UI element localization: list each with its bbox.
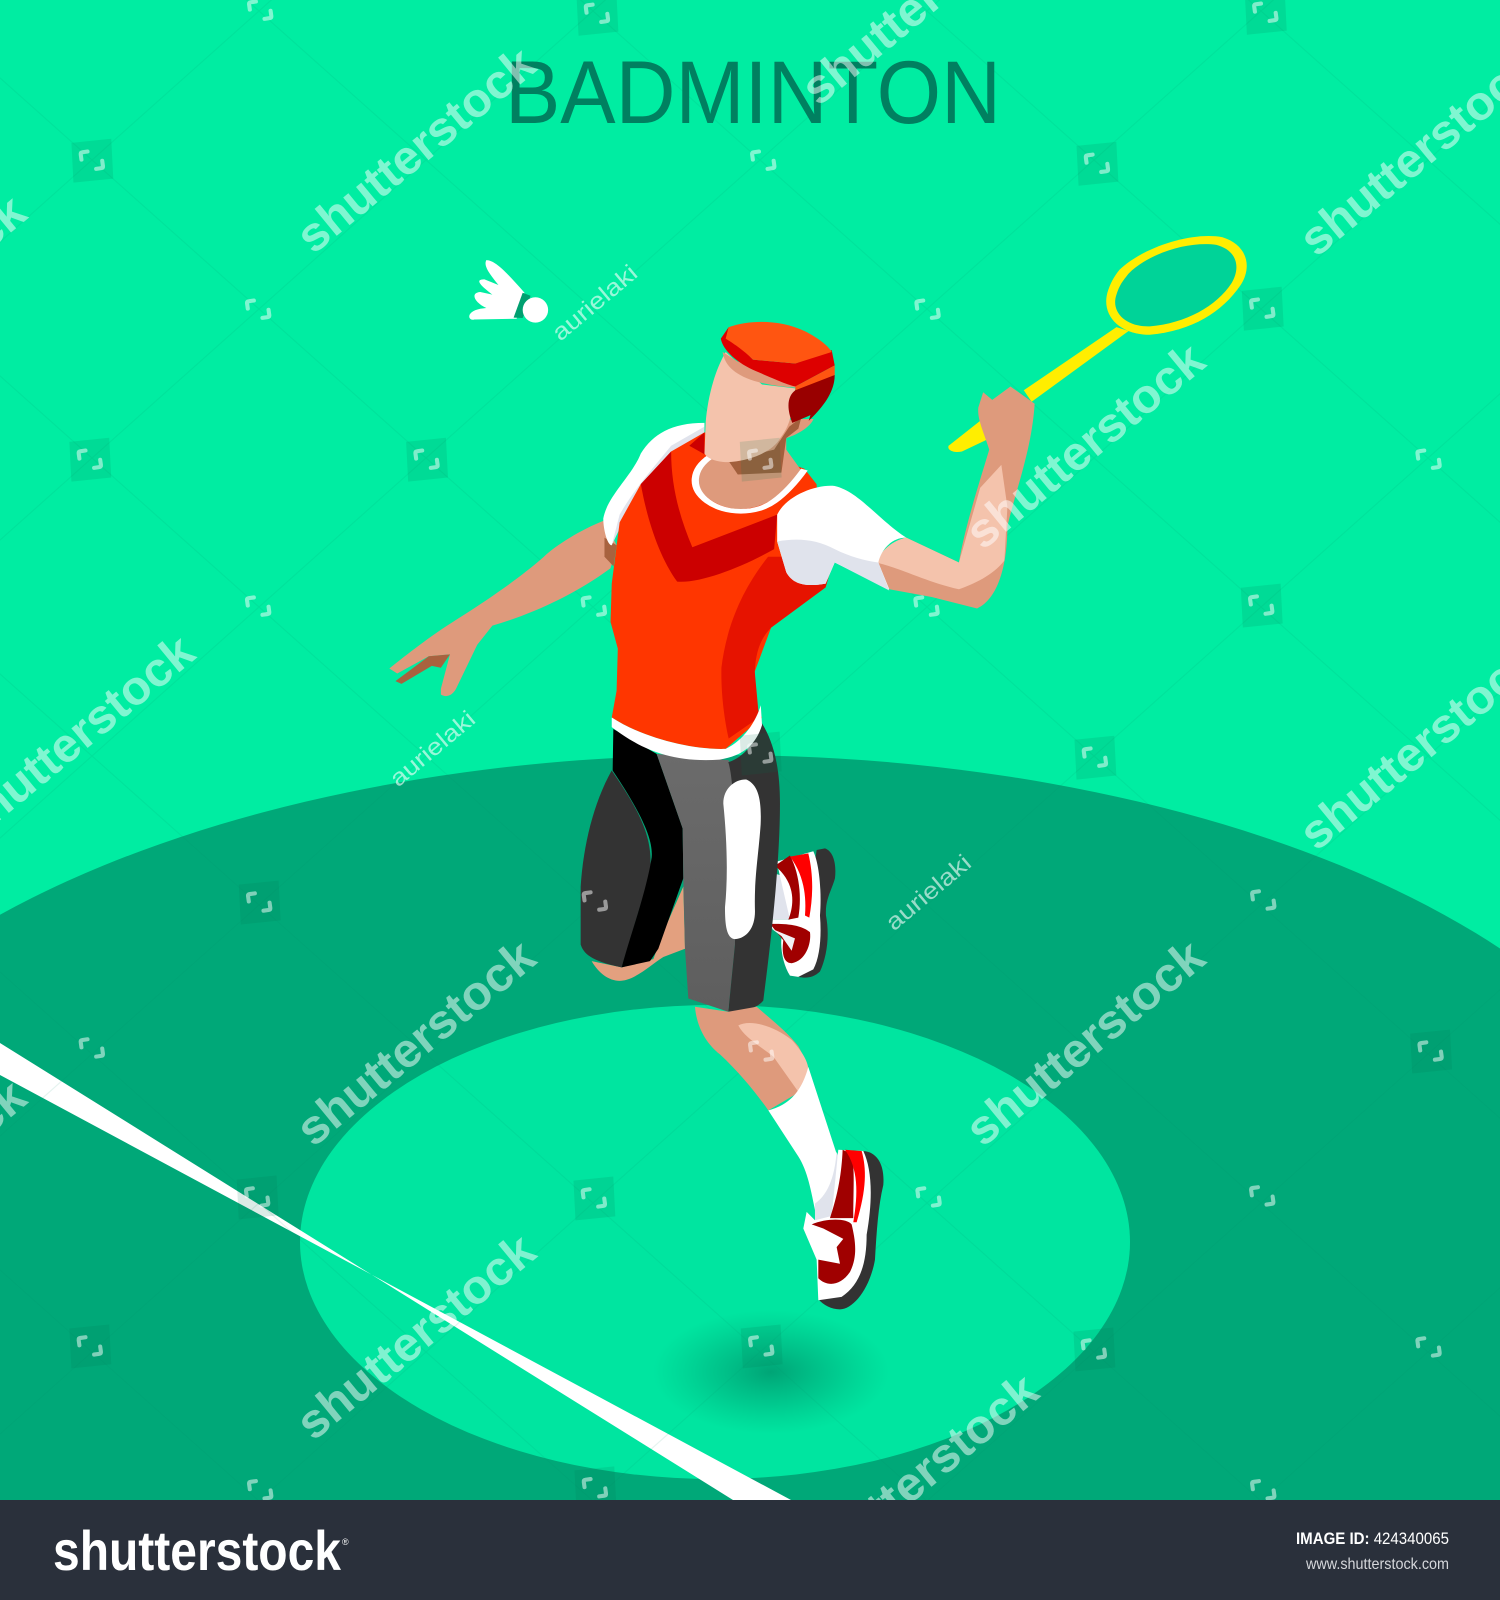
contributor watermarks: text xyxy=(384,260,976,935)
court: dark green ellipse xyxy=(0,755,1500,1600)
vest body xyxy=(611,432,826,749)
back foot xyxy=(772,848,835,978)
shorts xyxy=(581,723,780,1012)
collar xyxy=(695,457,804,511)
contributor watermarks: text: aurielaki xyxy=(880,849,976,935)
footer logo: shutterstock xyxy=(53,1519,342,1582)
back leg xyxy=(592,887,685,981)
hair xyxy=(721,327,835,386)
shuttlecock xyxy=(469,260,548,323)
neck xyxy=(695,419,814,509)
stock watermarks: text: shutterstock xyxy=(956,930,1215,1156)
contributor watermarks: text: aurielaki xyxy=(384,705,480,792)
stock watermarks: text: shutterstock xyxy=(287,37,546,264)
head xyxy=(704,322,835,462)
vest side shade xyxy=(721,557,835,739)
shirt hem xyxy=(612,705,762,760)
website: www.shutterstock.com xyxy=(1305,1556,1449,1573)
racket xyxy=(948,236,1247,452)
stock watermarks: text: shutterstock xyxy=(287,930,546,1156)
left arm and hand xyxy=(389,520,617,696)
jersey xyxy=(603,417,906,760)
registered mark: ® xyxy=(342,1537,349,1547)
contributor watermarks: text: aurielaki xyxy=(547,260,642,346)
image id: IMAGE ID: 424340065 xyxy=(1296,1529,1449,1548)
right sleeve xyxy=(777,486,906,589)
stock watermarks: text: shutterstock xyxy=(790,1363,1049,1590)
vest chevron xyxy=(641,452,777,582)
right arm and hand xyxy=(876,386,1035,608)
footer bar xyxy=(0,1500,1500,1600)
court: inner light circle xyxy=(300,1005,1130,1479)
player shadow xyxy=(653,1310,889,1434)
title: BADMINTON xyxy=(505,42,1001,142)
front leg and shoe xyxy=(695,1007,884,1309)
stock watermarks: text: shutterstock xyxy=(287,1224,546,1450)
face xyxy=(704,352,795,462)
court boundary white line xyxy=(0,1043,791,1500)
stock watermarks: text: shutterstock xyxy=(956,333,1215,560)
left sleeve xyxy=(603,423,704,545)
